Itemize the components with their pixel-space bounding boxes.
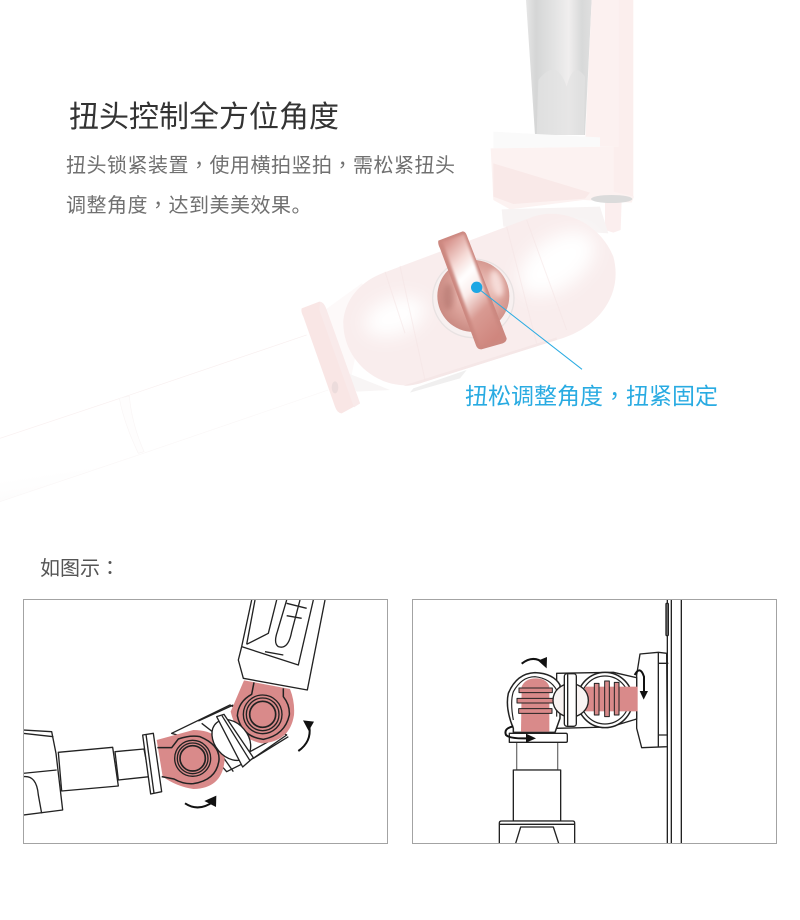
center ball and disc: [553, 674, 588, 726]
description text: 扭头锁紧装置，使用横拍竖拍，需松紧扭头: [66, 155, 456, 177]
phone edge lines: [666, 600, 681, 843]
pointer dot and leader line: [471, 282, 582, 369]
link plates behind lobes: [172, 705, 288, 772]
section label: 如图示：: [40, 558, 120, 580]
left clamp: [23, 730, 63, 815]
arrow: base: [505, 726, 536, 743]
extension tube: [0, 335, 328, 502]
stand below: [499, 742, 575, 843]
base plate: [509, 733, 567, 742]
rotation arrow right: [298, 720, 314, 751]
center ball and plate: [211, 714, 254, 768]
flange: [143, 733, 162, 794]
arm: [557, 672, 637, 728]
flange: [301, 302, 360, 413]
callout: 扭松调整角度，扭紧固定: [465, 383, 718, 409]
arrow: top: [522, 657, 547, 668]
telescopic tube: [58, 747, 149, 791]
description text: [66, 154, 456, 217]
left lobe with pink shaft: [507, 673, 560, 732]
pink lobe right: [231, 680, 294, 743]
right lobe with pink shaft: [577, 672, 638, 728]
phone clamp: glass and back: [491, 0, 634, 233]
capsule joint body: [325, 214, 616, 393]
wall clamp: [637, 652, 668, 748]
tensioning knob: [433, 231, 514, 349]
clamp at top: [238, 600, 325, 690]
title: 扭头控制全方位角度: [69, 101, 339, 134]
arrow: right: [635, 670, 648, 700]
hero: selfie stick joint: [0, 0, 634, 502]
pink lobe left: [157, 730, 225, 789]
rotation arrow lower: [185, 796, 216, 807]
description text: 调整角度，达到美美效果。: [66, 195, 312, 217]
panel: rotate joint, side view: [23, 600, 387, 844]
panel: rotate joint, front view: [412, 600, 776, 844]
